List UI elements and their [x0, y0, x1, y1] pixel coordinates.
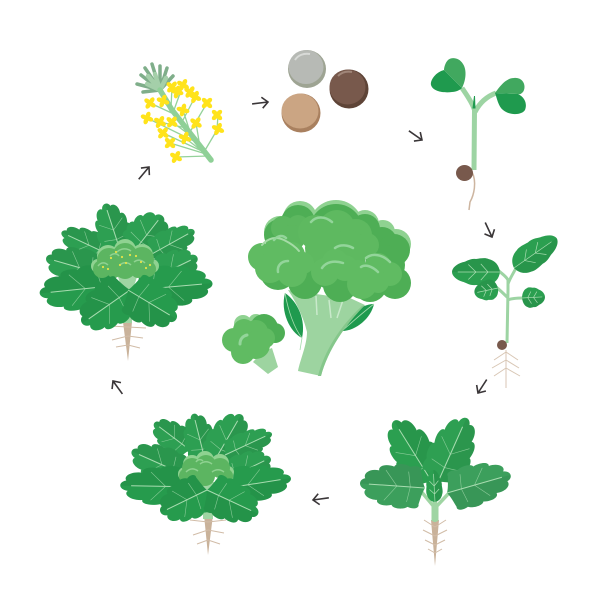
- flowering branch: [137, 64, 227, 166]
- floret: lower right: [346, 253, 402, 299]
- cotyledon right: [495, 78, 526, 114]
- cotyledon left: [431, 58, 466, 92]
- sprout: [431, 58, 526, 210]
- small head stalk: [201, 482, 215, 492]
- root: [423, 520, 447, 566]
- floret: back left: [271, 215, 309, 251]
- bud cluster: [137, 64, 173, 92]
- stem: [203, 505, 213, 519]
- seeds: [282, 50, 368, 132]
- highlights: [262, 238, 299, 251]
- floret: lower centre: [311, 249, 358, 286]
- small head: [178, 451, 234, 486]
- central large broccoli: [248, 200, 411, 376]
- arrow: sprout to seedling: [480, 220, 497, 239]
- stem leaf left: [284, 293, 303, 350]
- budding plant: [120, 405, 294, 555]
- yellow flowers: [139, 76, 227, 166]
- front leaves: [151, 471, 216, 532]
- leaves: [506, 227, 565, 279]
- root: [190, 515, 226, 555]
- root: [110, 322, 146, 361]
- seed: [497, 340, 507, 350]
- mature plant: [37, 198, 214, 361]
- floret: left front: [248, 237, 314, 287]
- stem: [123, 305, 132, 323]
- back leaves: [145, 411, 199, 462]
- stem leaf right: [335, 304, 374, 342]
- roots: [492, 350, 520, 388]
- stem: [420, 480, 450, 522]
- seed: grey: [288, 50, 326, 88]
- back leaves: [55, 218, 117, 269]
- seed: brown: [330, 70, 368, 108]
- arrow: seeds to sprout: [406, 126, 425, 145]
- leaves: [375, 409, 451, 494]
- seed: tan: [282, 94, 320, 132]
- crown dark base: [260, 204, 411, 302]
- main stem: [160, 90, 211, 160]
- arrow: mature plant to flowers: [135, 163, 153, 183]
- young plant: [358, 409, 516, 566]
- arrow: flower to seeds: [251, 97, 269, 109]
- front leaves: [69, 271, 143, 343]
- small stem: [253, 348, 278, 374]
- root: [469, 172, 475, 210]
- small crown: [234, 314, 264, 333]
- stem: [496, 268, 523, 343]
- sprout seed: [456, 165, 473, 181]
- arrow: budding plant to mature plant: [109, 378, 127, 397]
- stem: [462, 88, 496, 170]
- small broccoli floret: [222, 314, 285, 374]
- side stems: [147, 85, 218, 157]
- head stalk: [117, 274, 138, 292]
- arrow: seedling to young plant: [473, 377, 491, 396]
- flowering head: [91, 239, 159, 279]
- floret: top centre: [298, 210, 379, 270]
- seedling with true leaves: [452, 227, 565, 388]
- trunk: [288, 290, 365, 376]
- arrow: young plant to budding plant: [312, 492, 330, 505]
- crown rim: [264, 200, 411, 259]
